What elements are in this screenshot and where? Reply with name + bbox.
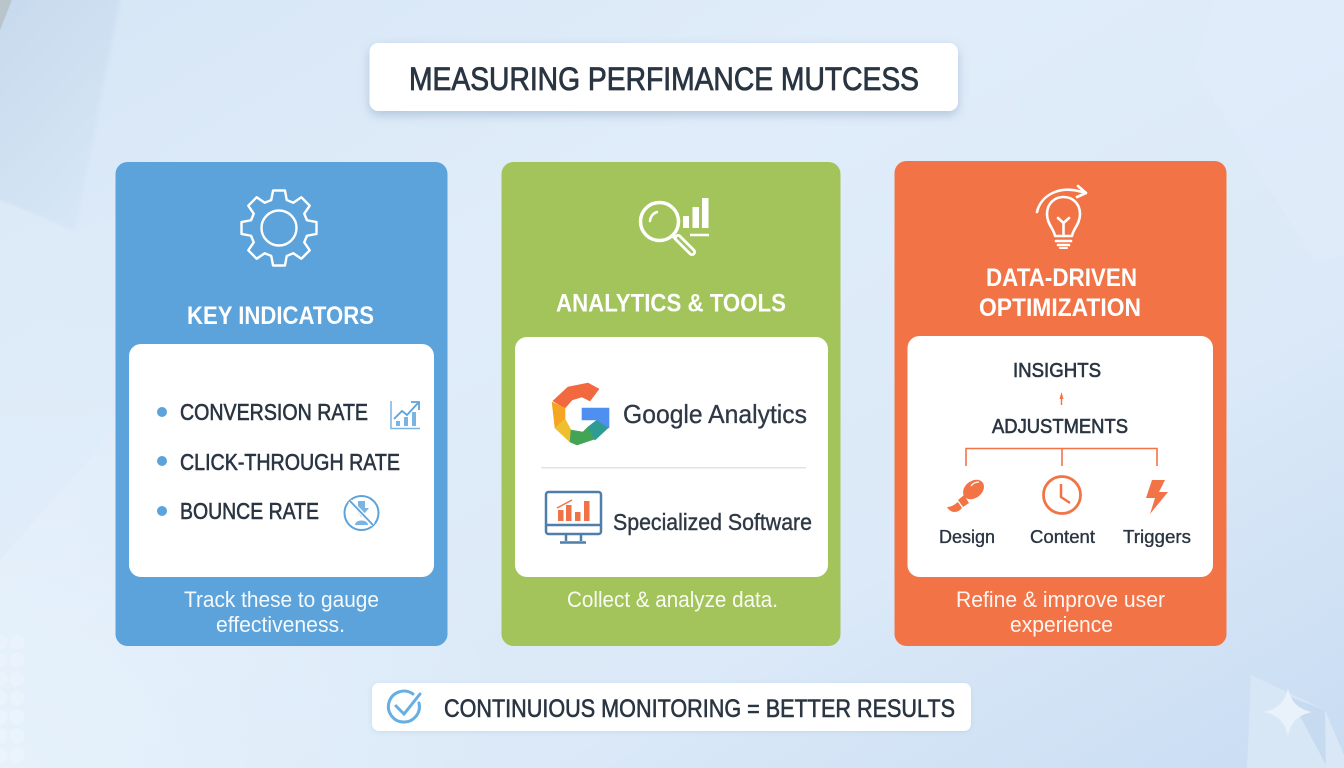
decoration: sparkle with facets	[1247, 675, 1344, 768]
title: MEASURING PERFIMANCE MUTCESS	[409, 61, 919, 97]
icon: rising chart	[391, 401, 420, 428]
icon: no bounce	[344, 496, 378, 530]
icon: paintbrush	[947, 476, 988, 512]
list item: click-through rate: CLICK-THROUGH RATE	[180, 449, 400, 475]
title	[370, 43, 958, 111]
decoration: dot grid	[0, 634, 24, 762]
card: optimization flow	[908, 336, 1213, 577]
caption: track these: effectiveness.	[216, 612, 345, 637]
icon: check circle	[388, 691, 420, 722]
label: insights: INSIGHTS	[1013, 360, 1101, 382]
label: content: Content	[1030, 527, 1095, 547]
icon: magnifier and bars	[640, 198, 709, 252]
icon: clock	[1044, 476, 1080, 514]
panel: key indicators	[116, 162, 448, 646]
footer banner	[372, 683, 971, 731]
label: adjustments: ADJUSTMENTS	[992, 416, 1128, 438]
caption: refine and improve: experience	[1010, 612, 1113, 637]
heading: data-driven optimization: OPTIMIZATION	[979, 294, 1141, 322]
card: indicators list	[129, 344, 434, 577]
heading: analytics and tools: ANALYTICS & TOOLS	[556, 290, 786, 318]
panel: analytics and tools	[502, 162, 840, 646]
panel: data-driven optimization	[894, 161, 1226, 646]
icon: bulb with arrow	[1037, 186, 1086, 248]
label: triggers: Triggers	[1123, 527, 1191, 547]
heading: data-driven optimization: DATA-DRIVEN	[986, 264, 1137, 292]
connector tree	[966, 448, 1157, 466]
icon: gear	[242, 190, 316, 266]
label: google analytics: Google Analytics	[623, 399, 807, 429]
caption: collect and analyze: Collect & analyze data.	[567, 587, 778, 612]
footer text: CONTINUIOUS MONITORING = BETTER RESULTS	[444, 695, 955, 723]
icon: google logo	[552, 383, 609, 445]
arrow: insights to adjustments	[1060, 392, 1064, 405]
caption: refine and improve: Refine & improve user	[956, 587, 1165, 612]
heading: key indicators: KEY INDICATORS	[187, 302, 374, 330]
icon: monitor chart	[546, 492, 601, 542]
list item: bounce rate: BOUNCE RATE	[180, 498, 319, 524]
label: specialized software: Specialized Software	[613, 509, 812, 535]
label: design: Design	[939, 527, 995, 547]
list item: conversion rate: CONVERSION RATE	[180, 399, 368, 425]
caption: track these: Track these to gauge	[184, 587, 379, 612]
icon: lightning bolt	[1146, 480, 1168, 514]
card: tools	[515, 337, 828, 577]
